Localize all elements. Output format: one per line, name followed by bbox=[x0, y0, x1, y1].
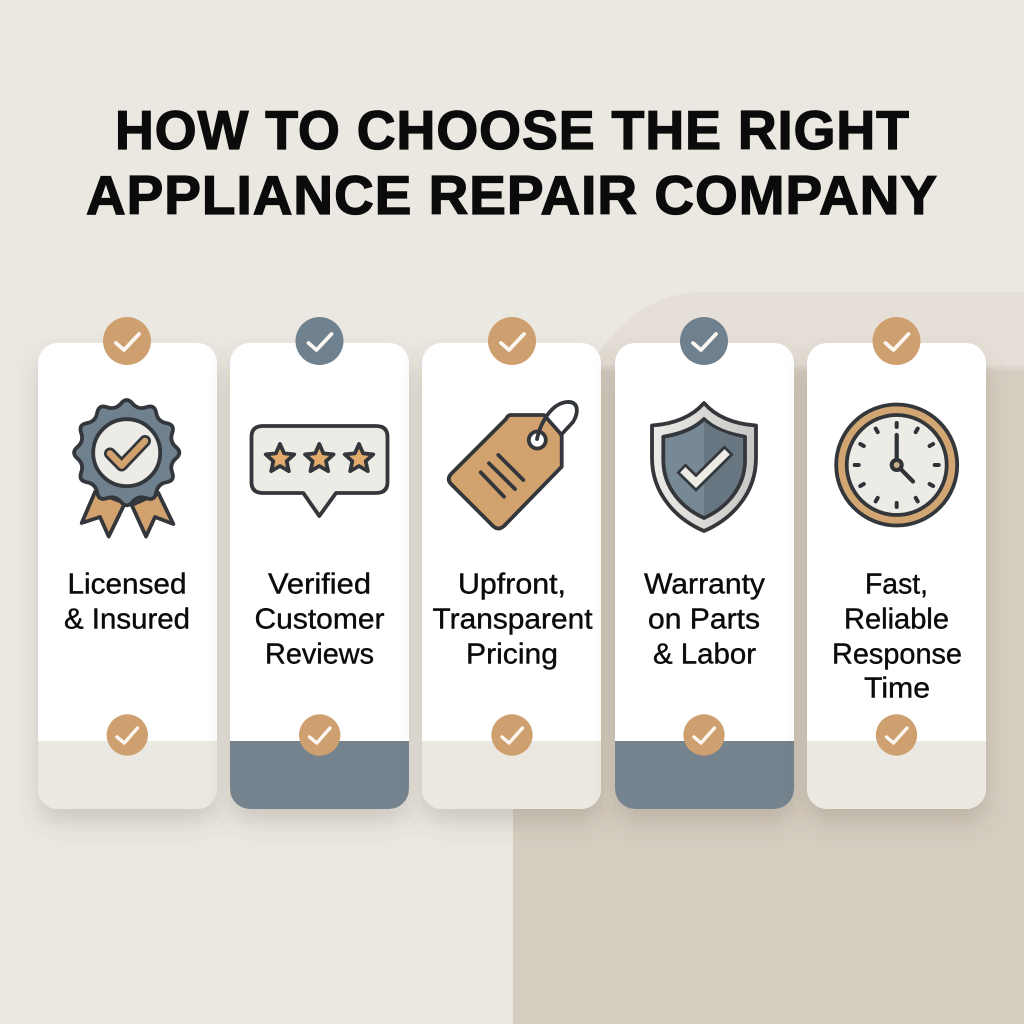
label: Transparent bbox=[432, 604, 592, 636]
label: Reliable bbox=[844, 604, 949, 636]
panel: licensed and insured bbox=[38, 317, 217, 809]
bottom check badge bbox=[876, 714, 917, 756]
label: & Labor bbox=[653, 638, 756, 670]
label: Fast, bbox=[865, 568, 928, 600]
label: Reviews bbox=[265, 638, 374, 670]
panel: fast reliable response time bbox=[807, 317, 986, 809]
card footer bbox=[230, 741, 409, 809]
label bbox=[254, 568, 385, 670]
title: HOW TO CHOOSE THE RIGHT bbox=[115, 99, 910, 161]
label: Verified bbox=[268, 568, 371, 600]
panel: verified customer reviews bbox=[230, 317, 409, 809]
bottom check badge bbox=[491, 714, 533, 756]
bottom check badge bbox=[107, 714, 148, 756]
panel: upfront transparent pricing bbox=[422, 317, 601, 809]
label: Time bbox=[864, 672, 930, 704]
icon: price tag bbox=[449, 402, 577, 528]
icon: rosette award bbox=[74, 400, 179, 536]
bottom check badge bbox=[683, 714, 725, 756]
label: Pricing bbox=[466, 638, 558, 670]
top check badge bbox=[296, 317, 344, 365]
label bbox=[832, 568, 962, 704]
label: Upfront, bbox=[458, 568, 566, 600]
label: Licensed bbox=[68, 568, 186, 600]
top check badge bbox=[872, 317, 920, 365]
icon: shield bbox=[652, 403, 756, 531]
label: Customer bbox=[254, 604, 385, 636]
label bbox=[432, 568, 592, 670]
label: Response bbox=[832, 638, 962, 670]
card footer bbox=[615, 741, 794, 809]
label: on Parts bbox=[648, 604, 760, 636]
card footer bbox=[807, 741, 986, 809]
card footer bbox=[422, 741, 601, 809]
label: Warranty bbox=[644, 568, 766, 600]
title: APPLIANCE REPAIR COMPANY bbox=[86, 164, 938, 226]
top check badge bbox=[103, 317, 151, 365]
card footer bbox=[38, 741, 217, 809]
icon: speech bubble with stars bbox=[252, 426, 388, 516]
top check badge bbox=[488, 317, 536, 365]
label bbox=[64, 568, 190, 636]
icon: clock bbox=[836, 404, 957, 526]
title bbox=[86, 99, 938, 226]
panel: warranty on parts and labor bbox=[615, 317, 794, 809]
label bbox=[644, 568, 766, 670]
bottom check badge bbox=[299, 714, 340, 756]
top check badge bbox=[680, 317, 728, 365]
label: & Insured bbox=[64, 604, 190, 636]
